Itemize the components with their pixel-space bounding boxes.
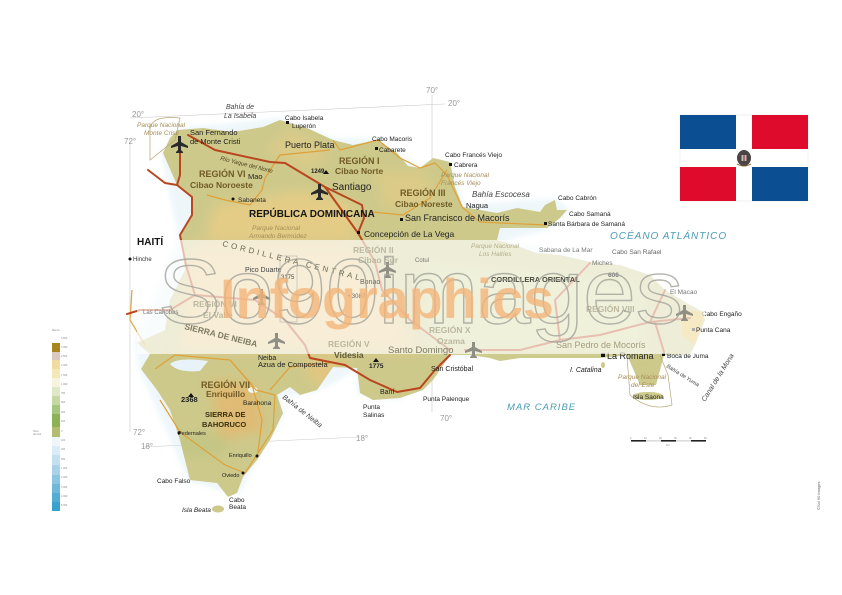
labels: regions: Enriquillo (206, 389, 245, 399)
map graticule (130, 95, 445, 447)
watermark band (137, 240, 705, 354)
labels over band: Pico Duarte (245, 267, 282, 274)
labels: regions: REGIÓN VI (199, 168, 246, 179)
watermark: Infographics (220, 267, 554, 330)
labels: water: Bahía de Neiba (281, 394, 323, 429)
legend: elevation scale: 1 500 (61, 374, 68, 377)
legend: elevation scale: 2 000 (61, 476, 68, 479)
legend: elevation scale: 2 500 (61, 355, 68, 358)
labels over band: REGIÓN X (429, 324, 471, 335)
labels: water: OCÉANO ATLÁNTICO (610, 229, 727, 242)
scale bar: 20 (659, 437, 662, 440)
icon: coat of arms (737, 150, 751, 166)
labels: places: Puerto Plata (285, 140, 335, 150)
labels: places: Neiba (258, 355, 276, 362)
legend: elevation scale: 500 (61, 401, 66, 404)
labels: places: 2368 (181, 395, 198, 404)
labels: places: Punta Palenque (423, 396, 470, 403)
scale bar: 50 (704, 437, 707, 440)
labels: water: La Isabela (224, 113, 256, 120)
scale bar (630, 437, 707, 447)
labels: parks and coordinates: Monte Cristi (144, 130, 179, 137)
labels: parks and coordinates: Armando Bermúdez (248, 233, 308, 240)
legend: elevation scale: Nivel (33, 430, 39, 433)
labels: places: Luperón (292, 123, 316, 130)
labels over band: REGIÓN VIII (586, 303, 635, 314)
labels: places: Nagua (466, 201, 489, 210)
legend: elevation scale: 200 (61, 448, 66, 451)
labels: regions: Cibao Norte (335, 166, 383, 176)
labels: places: Boca de Juma (667, 353, 709, 360)
labels over band: SIERRA DE NEIBA (184, 321, 258, 349)
labels: regions: Cibao Noroeste (190, 180, 253, 190)
labels: places: Isla Saona (633, 394, 664, 401)
labels: places: Cabarete (379, 147, 406, 154)
labels: regions: REGIÓN VII (201, 379, 250, 390)
labels over band (128, 235, 731, 360)
legend: elevation scale: 100 (61, 420, 66, 423)
labels: water: Canal de la Mona (701, 353, 736, 403)
labels: parks and coordinates: Río Yaque del Norte (220, 156, 274, 175)
secondary roads (130, 140, 545, 473)
labels: places: Cabo (229, 497, 245, 504)
labels: parks and coordinates: 18° (356, 434, 368, 443)
labels: places: Azua de Compostela (258, 360, 328, 369)
labels: places: 1775 (369, 363, 384, 370)
place markers (178, 121, 695, 474)
labels: places: Cabo Engaño (702, 311, 742, 318)
labels over band: Miches (592, 260, 613, 267)
icons: faded airports (253, 262, 693, 358)
labels: places: de Monte Cristi (190, 137, 241, 146)
labels: places: I. Catalina (570, 367, 602, 374)
labels over band: Cotuí (415, 258, 430, 264)
labels: places: Cabo Isabela (285, 115, 324, 122)
labels: places: Mao (248, 172, 263, 181)
labels over band: Santo Domingo (388, 345, 453, 356)
map: land relief (120, 110, 720, 512)
main roads (127, 135, 690, 392)
labels over band: Ozama (437, 336, 465, 346)
labels: parks and coordinates: Parque Nacional (618, 374, 667, 381)
labels: parks and coordinates: 20° (132, 110, 144, 119)
labels: parks and coordinates: 70° (440, 414, 452, 423)
icon: airport Santiago (311, 184, 328, 200)
labels: places: Santiago (332, 182, 372, 193)
labels: parks and coordinates: 20° (448, 99, 460, 108)
labels: places: San Fernando (190, 128, 238, 137)
legend: elevation scale: 3 000 (61, 346, 68, 349)
labels: places: Pedernales (178, 431, 206, 437)
labels over band: Las Cahobas (143, 310, 178, 316)
labels: parks and coordinates: 70° (426, 86, 438, 95)
watermark: So90images (158, 241, 683, 343)
copyright: ©Sol 90 Images (816, 481, 821, 510)
Isla Beata (212, 506, 224, 512)
legend: elevation scale: del mar (33, 433, 42, 436)
labels: parks and coordinates: Parque Nacional (252, 225, 301, 232)
labels: parks and coordinates: del Este (631, 382, 655, 389)
labels: water: Bahía Escocesa (472, 190, 530, 199)
labels: places: Beata (229, 504, 246, 511)
scale bar: 0 (630, 437, 632, 440)
labels: regions: REPÚBLICA DOMINICANA (249, 207, 375, 220)
flag (680, 115, 808, 201)
labels over band: El Macao (670, 289, 697, 296)
labels: places: Barahona (243, 400, 272, 407)
scale bar: 30 (674, 437, 677, 440)
labels over band: REGIÓN V (328, 338, 370, 349)
labels: places: Santa Bárbara de Samaná (548, 221, 625, 228)
labels: places: San Francisco de Macorís (405, 213, 510, 223)
labels over band: Hinche (133, 257, 152, 263)
airport icons (171, 136, 328, 200)
legend: elevation scale: 1 000 (61, 467, 68, 470)
labels over band: San Pedro de Mocorís (556, 340, 646, 350)
labels: water: MAR CARIBE (507, 402, 576, 413)
labels: places: Cabo Macoris (372, 136, 413, 143)
labels over band: CORDILLERA CENTRAL (222, 239, 364, 283)
legend: elevation scale: 0 (61, 430, 63, 433)
labels: places: Sabaneta (238, 197, 266, 204)
labels over band: El Valle (203, 310, 233, 320)
labels: parks and coordinates: 18° (141, 442, 153, 451)
labels: places: Oviedo (222, 473, 239, 479)
labels: regions: SIERRA DE (205, 410, 246, 419)
labels: places: San Cristóbal (431, 366, 473, 373)
labels: parks and coordinates: Parque Nacional (441, 172, 490, 179)
labels over band: Bonao (360, 279, 380, 286)
labels: water: Bahía de Yuma (665, 364, 700, 389)
labels over band: HAITÍ (137, 235, 163, 248)
labels over band: 606 (608, 272, 619, 279)
legend: elevation scale: 3 000 (61, 486, 68, 489)
legend: elevation scale: 500 (61, 458, 66, 461)
legend: elevation scale: Metros (52, 329, 60, 332)
scale bar: 40 (689, 437, 692, 440)
labels: parks and coordinates (124, 86, 667, 451)
labels: regions: REGIÓN I (339, 155, 380, 166)
icon: airport Monte Cristi (171, 136, 188, 153)
legend: elevation scale (33, 329, 68, 511)
labels: parks and coordinates: Francés Viejo (441, 180, 481, 187)
labels: places: Isla Beata (182, 507, 211, 514)
labels over band: CORDILLERA ORIENTAL (491, 275, 580, 284)
labels: water: Bahía de (226, 104, 254, 111)
labels: places (157, 115, 742, 514)
labels: water (224, 104, 736, 429)
labels over band: REGIÓN VI (193, 298, 237, 309)
legend: elevation scale: 4 000 (61, 495, 68, 498)
labels over band: • 3087 (348, 294, 366, 300)
legend: elevation scale: 1 000 (61, 383, 68, 386)
labels over band: Punta Cana (696, 327, 731, 334)
scale bar: Km (666, 444, 670, 447)
labels over band: Videsia (334, 350, 364, 360)
labels: places: Cabo Falso (157, 478, 191, 485)
Isla Saona (633, 392, 663, 400)
legend: elevation scale: 5 000 (61, 504, 68, 507)
labels over band: REGIÓN II (353, 244, 394, 255)
parks (150, 118, 672, 407)
labels over band: Cabo San Rafael (612, 249, 662, 256)
legend: elevation scale: 750 (61, 392, 66, 395)
labels: places: Enriquillo (229, 453, 252, 459)
labels over band: Los Haitíes (479, 251, 512, 258)
labels: parks and coordinates: 72° (133, 428, 145, 437)
coast glow (137, 120, 703, 493)
labels: places: La Romana (607, 351, 654, 361)
relief fill (137, 120, 705, 497)
labels over band: 3175 (281, 275, 295, 281)
legend: elevation scale: 100 (61, 439, 66, 442)
legend: elevation scale: 2 000 (61, 364, 68, 367)
labels: places: Cabrera (454, 162, 478, 169)
labels: regions: REGIÓN III (400, 187, 446, 198)
labels: parks and coordinates: Parque Nacional (137, 122, 186, 129)
labels: places: Concepción de La Vega (364, 229, 455, 239)
lakes (170, 360, 208, 371)
labels over band: Sabana de La Mar (539, 247, 593, 254)
labels over band: Cibao Sur (358, 255, 399, 265)
labels: places: Cabo Samaná (569, 211, 611, 218)
labels: places: Baní (380, 389, 394, 396)
labels: places: Salinas (363, 412, 385, 419)
labels: places: Punta (363, 404, 380, 411)
scale bar: 10 (644, 437, 647, 440)
labels: places: Cabo Francés Viejo (445, 152, 502, 159)
labels: regions: Cibao Noreste (395, 199, 453, 209)
labels: places: 1249 (311, 169, 325, 175)
labels over band: Parque Nacional (471, 243, 520, 250)
labels: regions: BAHORUCO (202, 420, 246, 429)
legend: elevation scale: 200 (61, 411, 66, 414)
labels: places: Cabo Cabrón (558, 195, 597, 202)
labels: regions (190, 155, 453, 429)
labels: parks and coordinates: 72° (124, 137, 136, 146)
legend: elevation scale: 3 500 (61, 337, 68, 340)
Isla Catalina (601, 362, 605, 368)
